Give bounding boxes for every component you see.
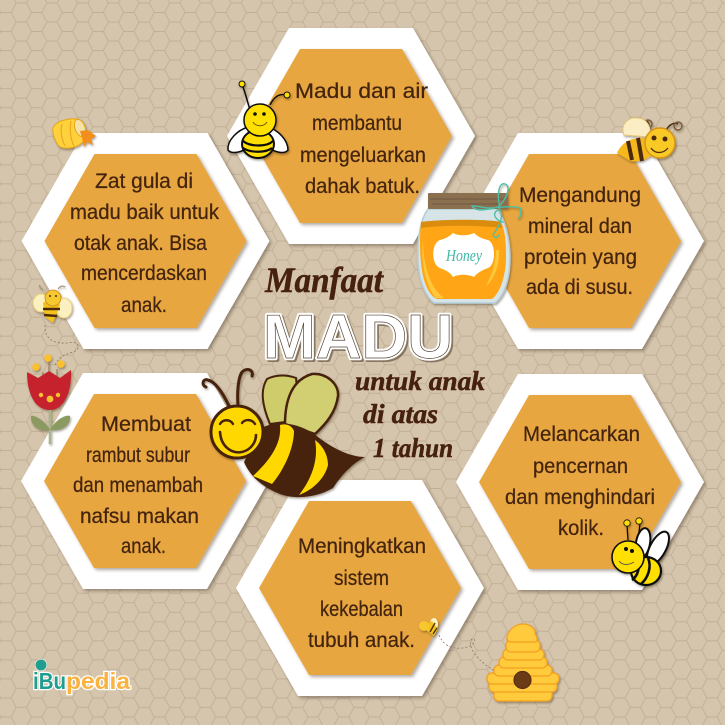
text block: top centre: mengeluarkan: [300, 144, 426, 167]
text block: bottom centre: sistem: [334, 567, 389, 590]
text block: bottom centre: Meningkatkan: [298, 535, 426, 558]
text block: lower left: Membuat: [101, 413, 191, 436]
text block: upper right: [519, 184, 641, 299]
subheading: untuk anak di atas 1 tahun: untuk anak: [355, 366, 485, 396]
icon: small bee left: [33, 285, 72, 323]
icon: tiny bee: [419, 618, 438, 636]
text block: upper left: Zat gula di: [95, 170, 193, 193]
text block: upper left: mencerdaskan: [81, 262, 207, 285]
text block: top centre: [295, 80, 428, 198]
panel: hexagon lower left: [21, 373, 269, 589]
heading: MADU: MADU: [263, 303, 453, 372]
panel: hexagon top centre: [227, 28, 475, 244]
text block: upper right: Mengandung: [519, 184, 641, 207]
text block: upper right: ada di susu.: [526, 276, 633, 299]
panel: hexagon upper left: [22, 133, 270, 349]
subheading: untuk anak di atas 1 tahun: [355, 366, 485, 463]
text block: bottom centre: [298, 535, 426, 652]
icon: bee lower right: [612, 518, 674, 585]
text block: upper left: madu baik untuk: [70, 201, 219, 224]
title: [263, 260, 485, 463]
dotted flight path left: [45, 325, 78, 365]
label: Honey: Honey: [445, 246, 482, 265]
panel: hexagon lower right: [456, 374, 704, 590]
text block: lower right: dan menghindari: [505, 486, 655, 509]
text block: bottom centre: kekebalan: [320, 598, 403, 621]
text block: lower left: anak.: [121, 535, 166, 558]
icon: bee top centre: [228, 81, 290, 158]
subheading: untuk anak di atas 1 tahun: di atas: [363, 399, 438, 429]
heading: Manfaat: Manfaat: [264, 260, 384, 300]
logo: iBupedia: iBu: [33, 668, 66, 694]
text block: lower left: dan menambah: [73, 474, 203, 497]
text block: lower left: nafsu makan: [80, 505, 199, 528]
icon: beehive: [487, 624, 559, 701]
text block: lower right: [505, 423, 655, 540]
text block: lower left: [73, 413, 203, 558]
text block: lower right: kolik.: [558, 517, 604, 540]
subheading: untuk anak di atas 1 tahun: 1 tahun: [373, 433, 453, 463]
ribbon: [472, 184, 521, 237]
text block: lower left: rambut subur: [86, 444, 190, 467]
text block: upper left: anak.: [121, 294, 167, 317]
text block: bottom centre: tubuh anak.: [308, 629, 415, 652]
text block: upper right: mineral dan: [528, 215, 632, 238]
text block: top centre: dahak batuk.: [305, 175, 420, 198]
text block: top centre: membantu: [312, 112, 402, 135]
text block: upper right: protein yang: [524, 246, 637, 269]
heading: MADU: MADU: [263, 303, 453, 372]
icon: honey pot: [53, 118, 96, 148]
text block: top centre: Madu dan air: [295, 80, 428, 103]
icon: bee top right: [617, 118, 682, 161]
text block: lower right: Melancarkan: [523, 423, 640, 446]
logo: iBupedia: [33, 660, 130, 694]
text block: lower right: pencernan: [533, 455, 628, 478]
panel: hexagon upper right: [456, 133, 704, 349]
text block: upper left: [70, 170, 219, 317]
logo: iBupedia: pedia: [66, 668, 130, 694]
icon: tulip flower: [27, 354, 71, 444]
panel: hexagon bottom centre: [236, 480, 484, 696]
heading: MADU: MADU: [265, 305, 455, 374]
icon: honey jar: [418, 184, 521, 303]
icon: big smiling bee: [203, 369, 365, 497]
dotted flight path to hive: [439, 635, 515, 672]
text block: upper left: otak anak. Bisa: [74, 232, 207, 255]
